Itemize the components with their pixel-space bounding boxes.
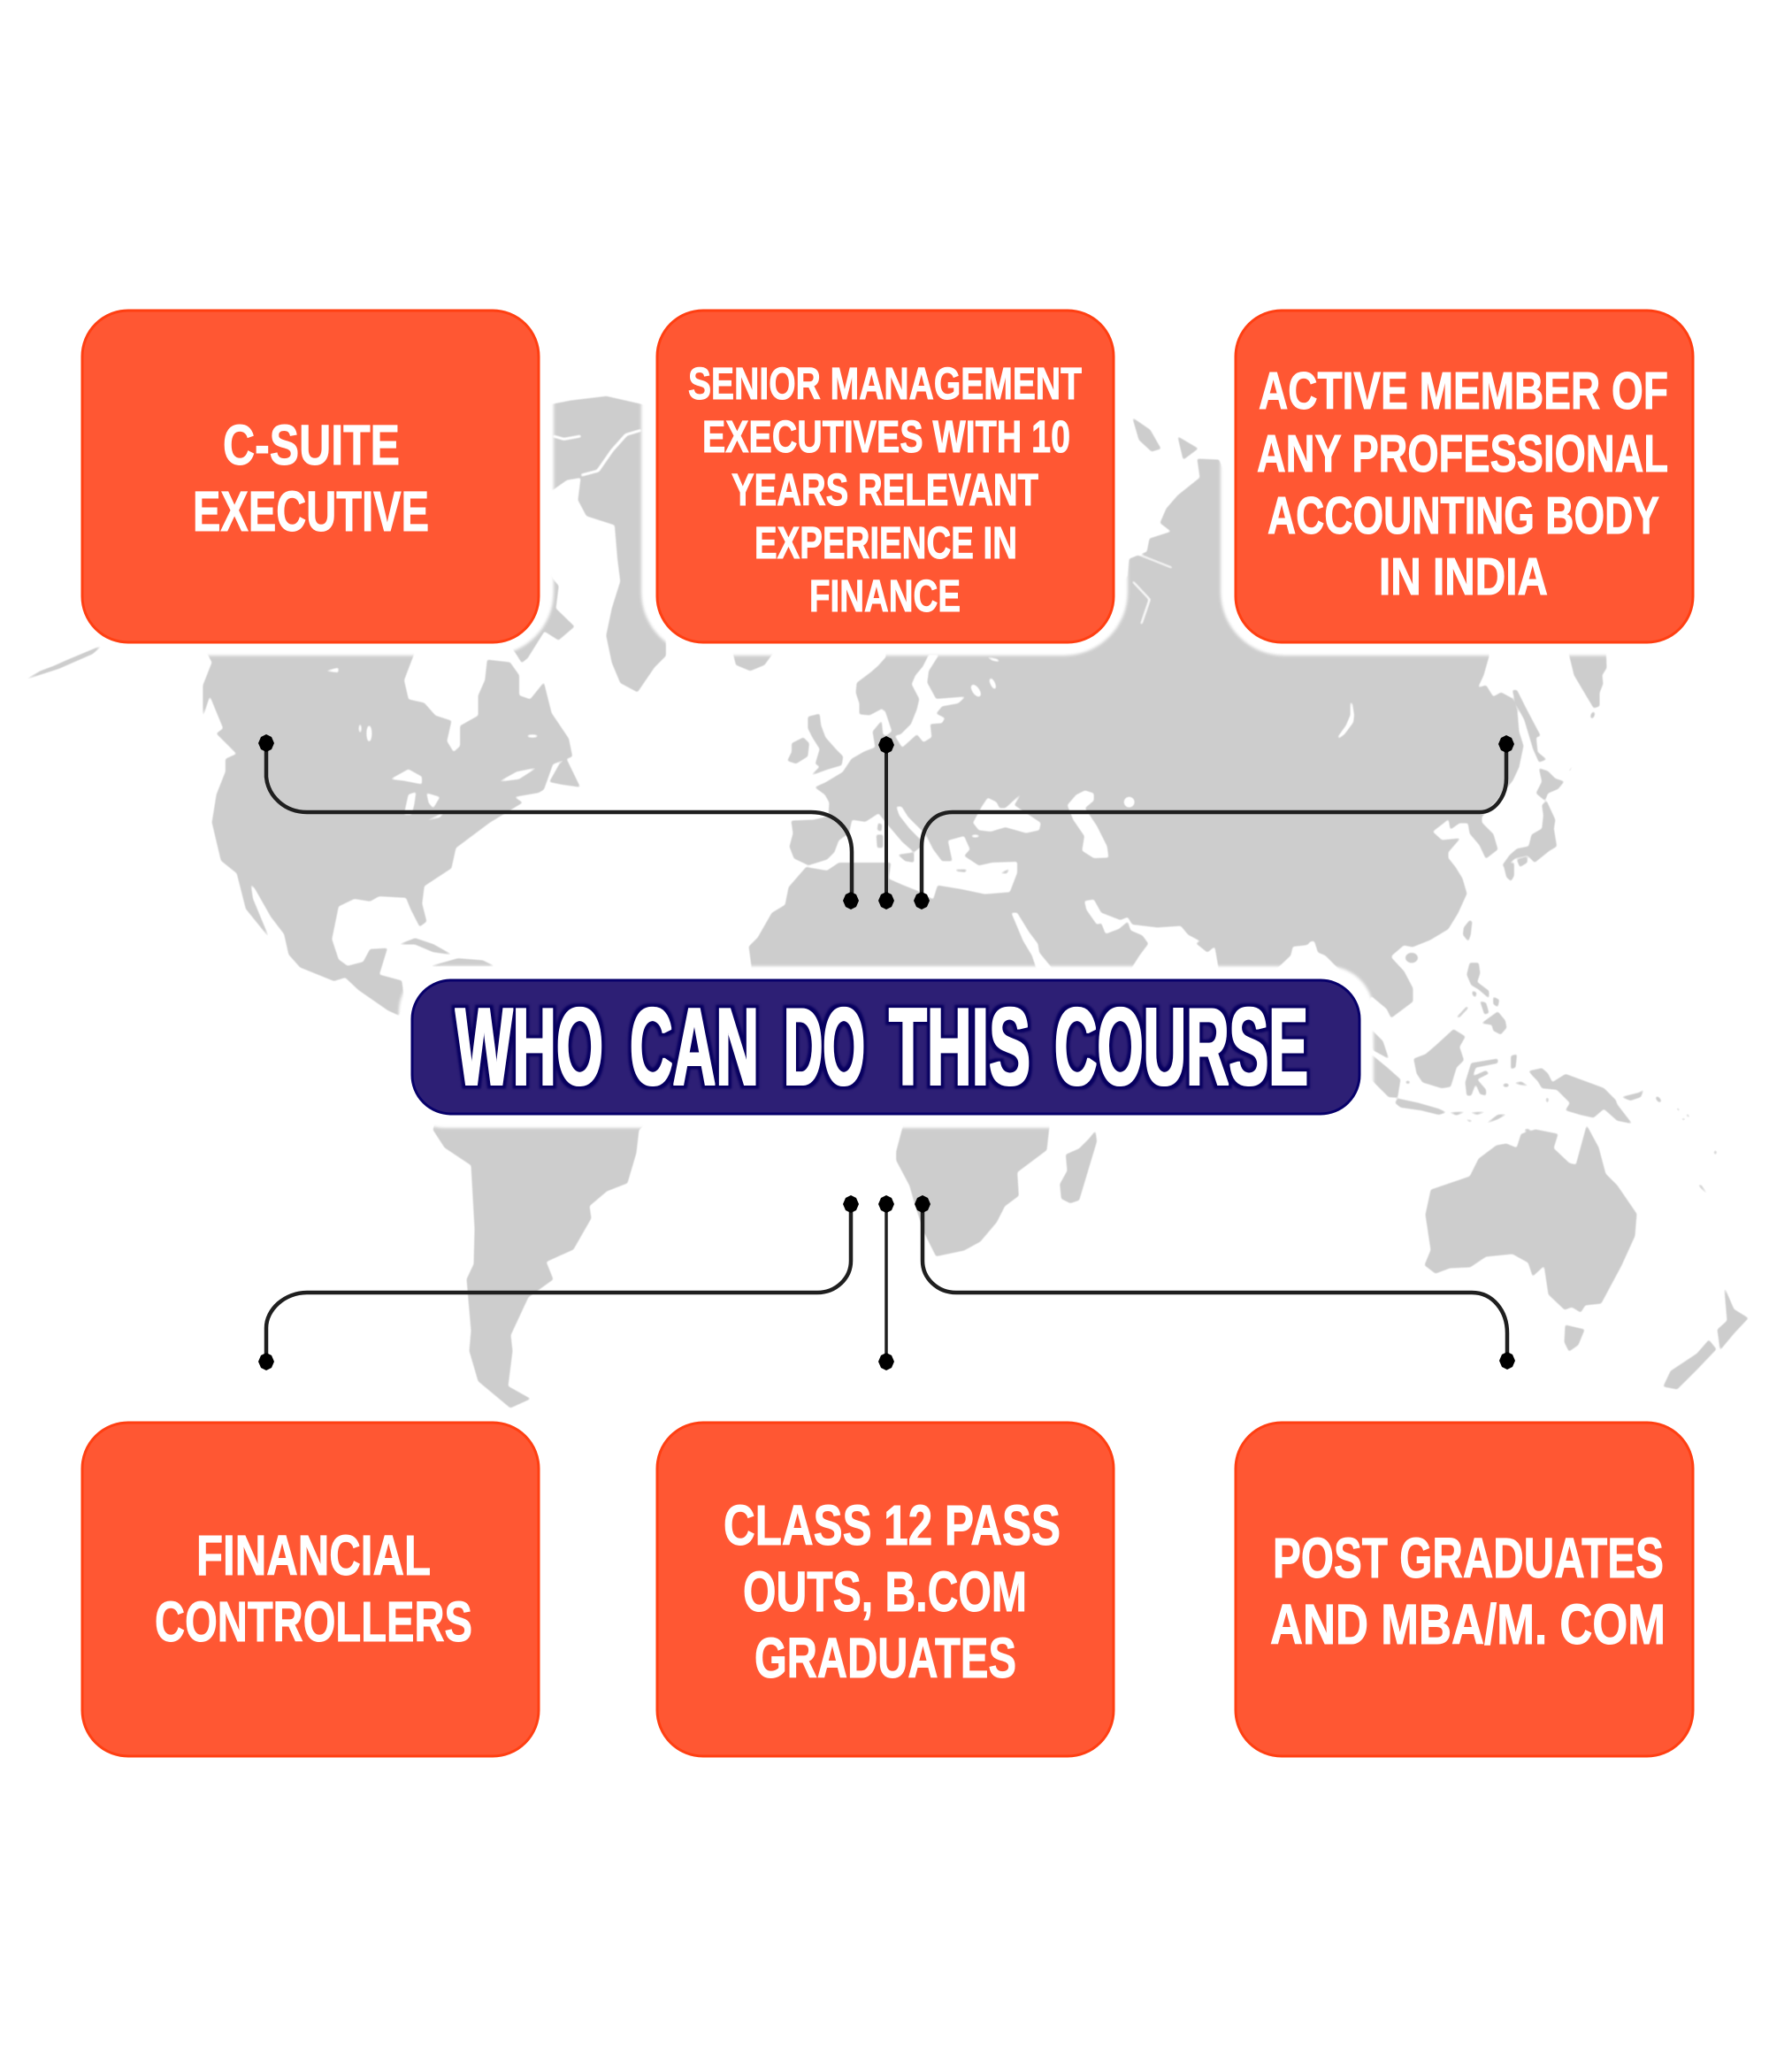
panel: active member of accounting body: IN INDIA bbox=[1379, 548, 1548, 606]
landmass: Eurasia and Africa bbox=[749, 418, 1523, 1256]
landmass: Americas bbox=[27, 396, 1606, 1408]
banner: who can do this course: DO bbox=[784, 986, 865, 1109]
connector: top right bbox=[922, 744, 1506, 901]
panel: class 12 pass outs: GRADUATES bbox=[754, 1626, 1016, 1690]
panel: financial controllers: FINANCIAL bbox=[196, 1523, 431, 1587]
panel: senior management executives: SENIOR MANAGEMENT bbox=[688, 358, 1082, 409]
panel: senior management executives: YEARS RELEVANT bbox=[731, 464, 1038, 515]
panel: active member of accounting body bbox=[1236, 311, 1693, 642]
world map background bbox=[0, 295, 1769, 1460]
banner: who can do this course bbox=[412, 980, 1359, 1114]
panel: senior management executives bbox=[657, 311, 1114, 642]
panel: post graduates bbox=[1236, 1423, 1693, 1756]
islands of Europe and the Mediterranean bbox=[787, 714, 1010, 873]
panel: senior management executives: EXPERIENCE IN bbox=[754, 518, 1017, 568]
panel: post graduates: AND MBA/M. COM bbox=[1270, 1592, 1666, 1656]
connector: top left bbox=[266, 743, 852, 901]
Africa south bbox=[896, 1124, 1050, 1256]
panel: financial controllers bbox=[82, 1423, 539, 1756]
banner: who can do this course: CAN bbox=[630, 986, 759, 1109]
Greenland and Arctic Canada bbox=[496, 396, 776, 692]
panel: active member of accounting body: ACTIVE MEMBER OF bbox=[1259, 362, 1668, 420]
connector: bottom left bbox=[266, 1204, 851, 1362]
banner: who can do this course: COURSE bbox=[1054, 986, 1308, 1109]
connector: bottom centre bbox=[884, 1204, 888, 1362]
panel: class 12 pass outs: OUTS, B.COM bbox=[743, 1560, 1027, 1623]
seas, gulfs and lakes bbox=[325, 430, 1354, 971]
Australia, Tasmania and New Zealand bbox=[1425, 1126, 1636, 1312]
panel: C-suite executive: EXECUTIVE bbox=[193, 480, 429, 543]
panel: class 12 pass outs: CLASS 12 PASS bbox=[724, 1493, 1061, 1557]
banner: who can do this course: THIS bbox=[889, 986, 1030, 1109]
white halos cut around panels bbox=[67, 295, 1707, 1128]
panel: class 12 pass outs bbox=[657, 1423, 1114, 1756]
panel: C-suite executive bbox=[82, 311, 539, 642]
islands of East Asia and the Pacific bbox=[1060, 690, 1748, 1389]
panel: senior management executives: EXECUTIVES WITH 10 bbox=[702, 411, 1070, 462]
panel: C-suite executive: C-SUITE bbox=[223, 413, 400, 477]
panel: senior management executives: FINANCE bbox=[809, 571, 961, 621]
banner: who can do this course: WHO bbox=[456, 986, 603, 1109]
connector: bottom right bbox=[923, 1204, 1507, 1361]
panel: financial controllers: CONTROLLERS bbox=[155, 1590, 472, 1654]
connector: top centre bbox=[884, 745, 888, 901]
connector end dots bbox=[258, 734, 1515, 1370]
Madagascar bbox=[1060, 1131, 1097, 1203]
